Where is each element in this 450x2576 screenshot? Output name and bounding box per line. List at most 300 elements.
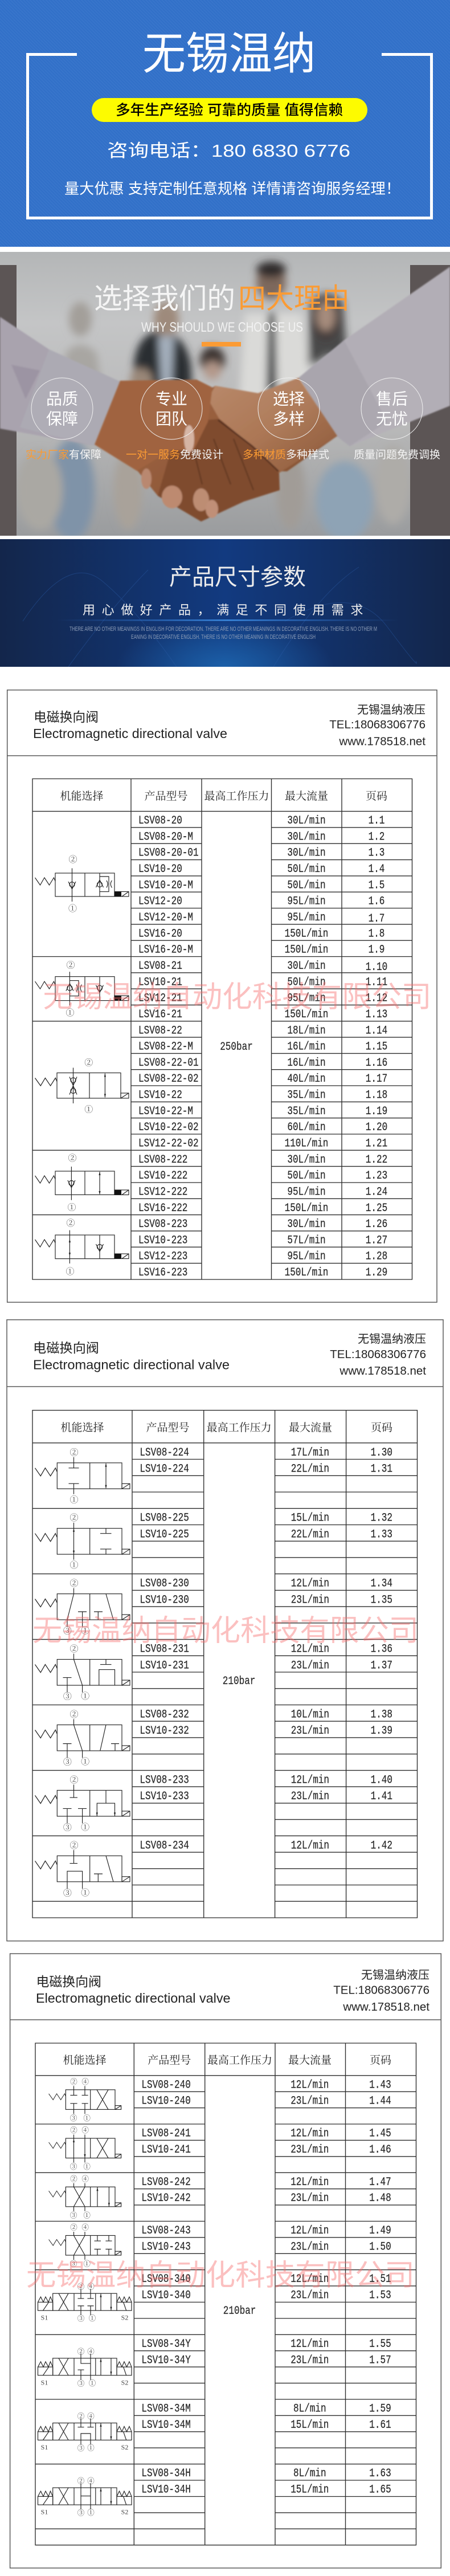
subheading: 用心做好产品，满足不同使用需求 — [83, 603, 370, 617]
sheet 3 page numbers: 1.49 — [369, 2225, 391, 2237]
valve symbol: LSV-340: ② — [77, 2281, 84, 2292]
sheet 3 model numbers: LSV10-340 — [141, 2289, 191, 2302]
sheet 1 flow values: 18L/min — [287, 1025, 326, 1037]
sheet 2 header right contact: 无锡温纳液压 — [358, 1332, 426, 1346]
sheet 3 page numbers: 1.48 — [369, 2192, 391, 2205]
sheet 1 page numbers: 1.19 — [366, 1105, 387, 1118]
decorative english text — [69, 627, 377, 639]
sheet 1 flow values: 30L/min — [287, 831, 326, 843]
sheet 3 model numbers: LSV10-240 — [141, 2095, 191, 2108]
sheet 3 model numbers: LSV10-34Y — [141, 2354, 191, 2367]
valve symbol: LSV-230 — [35, 1577, 130, 1637]
sheet 1 page numbers: 1.7 — [369, 913, 384, 926]
sheet 2 table grid — [32, 1411, 417, 1918]
sheet 1 model numbers: LSV10-20 — [138, 863, 182, 876]
sheet 3 flow values: 23L/min — [291, 2095, 329, 2108]
valve symbol: LSV-34Y: ① — [89, 2378, 96, 2388]
sheet 3 page numbers: 1.50 — [369, 2241, 391, 2253]
sheet 3 flow values: 23L/min — [291, 2289, 329, 2302]
sheet 1 page numbers — [366, 815, 387, 1279]
sheet 3 header right contact: 无锡温纳液压 — [361, 1968, 429, 1982]
badge: team: 专业 — [156, 390, 187, 408]
sheet 1 column headings: 页码 — [366, 788, 387, 803]
badge: after sales — [361, 378, 423, 439]
sheet 1 model numbers: LSV08-22 — [138, 1025, 182, 1037]
sheet 1 flow values: 30L/min — [287, 1218, 326, 1231]
sheet 3 model numbers: LSV08-34H — [141, 2468, 191, 2480]
valve symbol: LSV-243: ① — [83, 2258, 91, 2268]
subheading: english: WHY SHOULD WE CHOOSE US — [141, 320, 303, 335]
yellow slogan pill — [92, 98, 367, 122]
valve symbol: LSV-224: ② — [69, 1446, 79, 1458]
sheet 3 page numbers: 1.61 — [369, 2419, 391, 2432]
orange accent bar — [202, 342, 241, 347]
sheet 1 column headings: 产品型号 — [144, 788, 188, 803]
valve symbol: LSV-34M: ① — [87, 2443, 95, 2453]
valve symbol: LSV-21: ② — [66, 959, 75, 971]
sheet 2 page numbers: 1.34 — [371, 1578, 392, 1590]
sheet 2 header left — [33, 1340, 230, 1372]
photo: blurred office background with people — [0, 252, 450, 541]
sheet 1 column headings: 机能选择 — [60, 788, 104, 803]
sheet 1 page numbers: 1.2 — [369, 831, 384, 843]
valve symbol: LSV-225 — [35, 1511, 130, 1571]
sheet 1 model numbers: LSV16-222 — [138, 1202, 187, 1214]
badge: quality — [31, 378, 93, 439]
sheet 3 table grid — [35, 2043, 416, 2545]
sheet 1 pressure value: 250bar — [220, 1041, 253, 1054]
sheet 1 model numbers: LSV08-20 — [138, 815, 182, 828]
sheet 2 column headings: 产品型号 — [146, 1419, 190, 1434]
sheet 1 flow values: 16L/min — [287, 1057, 326, 1070]
sheet 1 header left: Electromagnetic directional valve — [33, 726, 227, 741]
sheet 3 page numbers: 1.44 — [369, 2095, 391, 2108]
sheet 1 flow values: 150L/min — [285, 944, 328, 956]
sheet 1 page numbers: 1.29 — [366, 1267, 387, 1279]
sheet 1 flow values: 35L/min — [287, 1089, 326, 1102]
valve symbol: LSV-242: ③ — [70, 2210, 77, 2220]
sheet 1 flow values: 50L/min — [287, 976, 326, 989]
sheet 1 flow values: 35L/min — [287, 1105, 326, 1118]
sheet 2 page numbers: 1.35 — [371, 1594, 392, 1607]
sheet 3 column headings: 产品型号 — [148, 2052, 191, 2067]
caption: after sales: 质量问题免费调换 — [354, 449, 440, 461]
sheet 3 header left: 电磁换向阀 — [36, 1974, 101, 1989]
panel: valve table sheet 3 — [10, 1954, 441, 2568]
valve symbol: LSV-232: ② — [69, 1708, 79, 1720]
valve symbol: LSV-223: ② — [66, 1217, 75, 1229]
sheet 3 flow values: 12L/min — [291, 2338, 329, 2351]
sheet 2 flow values: 22L/min — [291, 1529, 329, 1541]
sheet 3 page numbers: 1.46 — [369, 2143, 391, 2157]
valve symbol: LSV-230: ② — [69, 1577, 79, 1589]
valve symbol: LSV-222: ② — [68, 1152, 77, 1164]
sheet 3 page numbers — [369, 2079, 391, 2496]
sheet 1 model numbers: LSV08-20-01 — [138, 847, 199, 859]
valve symbol: LSV-34Y: ② — [77, 2346, 84, 2356]
sheet 1 page numbers: 1.4 — [369, 863, 384, 876]
valve symbol: LSV-20 — [35, 853, 129, 914]
sheet 3 model numbers — [141, 2079, 191, 2496]
valve symbol: LSV-232: ① — [81, 1755, 89, 1767]
watermark 3: 无锡温纳自动化科技有限公司 — [26, 2259, 415, 2292]
panel: navy parameters banner — [0, 539, 450, 667]
sheet 2 flow values — [291, 1446, 329, 1852]
photo: dark side bars — [0, 265, 450, 536]
sheet 3 flow values: 12L/min — [291, 2273, 329, 2286]
sheet 2 column headings: 最高工作压力 — [207, 1419, 272, 1434]
valve symbol: LSV-243: ② — [70, 2222, 77, 2232]
sheet 1 flow values: 30L/min — [287, 815, 326, 828]
sheet 2 flow values: 23L/min — [291, 1594, 329, 1607]
sheet 1 model numbers: LSV10-222 — [138, 1170, 187, 1183]
sheet 2 flow values: 10L/min — [291, 1709, 329, 1721]
sheet 2 page numbers: 1.42 — [371, 1840, 392, 1852]
sheet 1 flow values: 95L/min — [287, 1250, 326, 1263]
valve symbol: LSV-241: ② — [70, 2125, 77, 2135]
valve symbol: LSV-34H: ③ — [77, 2508, 84, 2518]
sheet 2 model numbers: LSV10-233 — [140, 1791, 189, 1803]
sheet 1 page numbers: 1.12 — [366, 992, 387, 1005]
sheet 1 flow values: 16L/min — [287, 1041, 326, 1053]
valve symbol: LSV-222 — [35, 1152, 129, 1213]
valve symbol: LSV-242: ① — [83, 2210, 91, 2220]
sheet 2 flow values: 23L/min — [291, 1725, 329, 1738]
sheet 3 flow values: 23L/min — [291, 2354, 329, 2367]
sheet 2 page numbers: 1.36 — [371, 1643, 392, 1656]
sheet 1 page numbers: 1.26 — [366, 1218, 387, 1231]
badge: team — [141, 378, 202, 439]
panel: hero banner — [0, 0, 450, 247]
valve symbol: LSV-240: ① — [83, 2113, 91, 2123]
sheet 3 flow values: 15L/min — [291, 2484, 329, 2496]
sheet 1 flow values — [285, 815, 328, 1279]
badge: after sales: 无忧 — [376, 410, 408, 427]
sheet 2 flow values: 12L/min — [291, 1840, 329, 1852]
sheet 2 header right contact — [330, 1332, 426, 1377]
sheet 3 page numbers: 1.53 — [369, 2289, 391, 2302]
sheet 1 flow values: 95L/min — [287, 895, 326, 908]
sheet 1 flow values: 95L/min — [287, 992, 326, 1005]
photo: handshake — [95, 378, 337, 521]
sheet 2 model numbers: LSV10-230 — [140, 1594, 189, 1607]
sheet 1 model numbers: LSV08-22-01 — [138, 1057, 199, 1070]
valve symbol: LSV-34Y: S1 — [41, 2378, 48, 2386]
sheet 1 flow values: 95L/min — [287, 1186, 326, 1199]
badge: choice — [258, 378, 320, 439]
panel: four reasons photo — [0, 252, 450, 541]
sheet 3 page numbers: 1.45 — [369, 2127, 391, 2140]
sheet 1 model numbers: LSV12-222 — [138, 1186, 187, 1199]
valve symbol: LSV-34H: ① — [87, 2507, 95, 2517]
badge: choice: 多样 — [273, 410, 305, 427]
valve symbol: LSV-241: ① — [83, 2161, 91, 2171]
sheet 2 page numbers — [371, 1446, 392, 1852]
sheet 3 model numbers: LSV10-241 — [141, 2143, 191, 2157]
sheet 1 page numbers: 1.10 — [366, 961, 387, 974]
sheet 3 flow values: 12L/min — [291, 2225, 329, 2237]
badge: after sales: 售后 — [376, 390, 408, 408]
sheet 3 column headings: 最高工作压力 — [207, 2052, 272, 2067]
valve symbol: LSV-340: S2 — [121, 2314, 128, 2322]
sheet 2 header left: Electromagnetic directional valve — [33, 1358, 230, 1372]
sheet 3 flow values: 23L/min — [291, 2192, 329, 2205]
badge: choice: 选择 — [273, 390, 305, 408]
valve symbol: LSV-34Y — [38, 2346, 132, 2388]
sheet 1 header right contact — [329, 703, 426, 748]
sheet 2 model numbers: LSV10-224 — [140, 1463, 189, 1476]
sheet 1 page numbers: 1.23 — [366, 1170, 387, 1183]
sheet 2 column headings: 页码 — [371, 1419, 392, 1434]
badge: quality: 品质 — [46, 390, 78, 408]
sheet 3 page numbers: 1.51 — [369, 2273, 391, 2286]
sheet 1 model numbers: LSV16-20 — [138, 928, 182, 940]
offer text: 量大优惠 支持定制任意规格 详情请咨询服务经理！ — [64, 180, 400, 197]
valve symbol: LSV-240: ③ — [70, 2113, 77, 2123]
sheet 2 flow values: 23L/min — [291, 1660, 329, 1672]
sheet 1 header right contact: TEL:18068306776 — [329, 718, 426, 731]
sheet 3 header right contact: TEL:18068306776 — [333, 1984, 429, 1997]
valve symbol: LSV-225: ① — [69, 1559, 79, 1571]
sheet 1 flow values: 57L/min — [287, 1234, 326, 1247]
sheet 2 page numbers: 1.40 — [371, 1774, 392, 1787]
sheet 3 header left — [36, 1974, 230, 2006]
sheet 1 header right contact: 无锡温纳液压 — [357, 703, 426, 716]
valve symbol: LSV-241: ④ — [81, 2125, 89, 2135]
sheet 1 model numbers: LSV08-20-M — [138, 831, 193, 843]
sheet 1 flow values: 95L/min — [287, 912, 326, 924]
sheet 2 model numbers: LSV10-231 — [140, 1660, 189, 1672]
sheet 1 model numbers: LSV10-22-M — [138, 1105, 193, 1118]
valve symbol: LSV-233: ① — [81, 1821, 89, 1833]
sheet 1 model numbers: LSV08-21 — [138, 960, 182, 973]
valve symbol: LSV-224: ① — [69, 1493, 79, 1505]
watermark 2: 无锡温纳自动化科技有限公司 — [32, 1615, 419, 1648]
sheet 2 flow values: 23L/min — [291, 1791, 329, 1803]
sheet 1 page numbers: 1.16 — [366, 1057, 387, 1070]
valve symbol: LSV-234: ① — [81, 1886, 89, 1898]
sheet 1 page numbers: 1.25 — [366, 1202, 387, 1214]
sheet 2 model numbers: LSV10-225 — [140, 1529, 189, 1541]
sheet 1 model numbers: LSV16-21 — [138, 1009, 182, 1021]
sheet 1 page numbers: 1.11 — [366, 976, 387, 989]
sheet 1 model numbers — [138, 815, 199, 1279]
sheet 2 page numbers: 1.38 — [371, 1709, 392, 1721]
sheet 1 model numbers: LSV16-20-M — [138, 944, 193, 956]
sheet 1 column headings: 最大流量 — [285, 788, 328, 803]
caption: team: 一对一服务免费设计 — [126, 449, 223, 461]
sheet 3 flow values: 12L/min — [291, 2079, 329, 2092]
valve symbol: LSV-233: ③ — [63, 1821, 72, 1833]
valve symbol: LSV-223: ① — [66, 1265, 75, 1277]
sheet 1 model numbers: LSV12-223 — [138, 1250, 187, 1263]
valve symbol: LSV-34M: ④ — [87, 2411, 95, 2421]
valve symbol: LSV-224 — [35, 1446, 130, 1505]
sheet 3 model numbers: LSV08-240 — [141, 2079, 191, 2092]
valve symbol: LSV-231: ① — [81, 1690, 89, 1702]
sheet 2 column headings: 机能选择 — [60, 1419, 104, 1434]
sheet 3 flow values: 12L/min — [291, 2176, 329, 2188]
valve symbol: LSV-22: ① — [84, 1103, 93, 1115]
valve symbol: LSV-34M: ② — [77, 2411, 84, 2421]
sheet 1 page numbers: 1.28 — [366, 1250, 387, 1263]
sheet 2 page numbers: 1.31 — [371, 1463, 392, 1476]
sheet 1 page numbers: 1.22 — [366, 1154, 387, 1166]
valve symbol: LSV-230: ① — [81, 1624, 89, 1636]
valve symbol: LSV-34H: S2 — [121, 2508, 128, 2516]
sheet 1 flow values: 150L/min — [285, 928, 328, 940]
sheet 3 model numbers: LSV08-243 — [141, 2225, 191, 2237]
sheet 3 flow values: 23L/min — [291, 2241, 329, 2253]
sheet 2 model numbers: LSV08-233 — [140, 1774, 189, 1787]
valve symbol: LSV-231: ③ — [63, 1690, 72, 1702]
sheet 1 header left: 电磁换向阀 — [34, 710, 99, 724]
sheet 1 flow values: 150L/min — [285, 1267, 328, 1279]
valve symbol: LSV-242: ② — [70, 2173, 77, 2183]
sheet 1 model numbers: LSV10-22 — [138, 1089, 182, 1102]
sheet 3 column headings — [63, 2052, 391, 2067]
sheet 2 column headings — [60, 1419, 392, 1434]
sheet 2 flow values: 15L/min — [291, 1512, 329, 1525]
sheet 3 page numbers: 1.43 — [369, 2079, 391, 2092]
valve symbol: LSV-234 — [35, 1839, 130, 1898]
sheet 3 flow values — [291, 2079, 329, 2496]
valve symbol: LSV-34M: S1 — [41, 2443, 48, 2451]
valve symbol: LSV-20: ② — [68, 853, 77, 865]
valve symbol: LSV-243: ④ — [81, 2222, 89, 2232]
sheet 1 flow values: 50L/min — [287, 863, 326, 876]
sheet 3 model numbers: LSV08-34Y — [141, 2338, 191, 2351]
sheet 1 page numbers: 1.3 — [369, 847, 384, 859]
valve symbol: LSV-34Y: ④ — [87, 2346, 95, 2356]
caption: quality: 实力厂家有保障 — [26, 449, 101, 461]
sheet 1 flow values: 150L/min — [285, 1009, 328, 1021]
sheet 2 model numbers: LSV08-232 — [140, 1709, 189, 1721]
badge: quality: 保障 — [46, 410, 78, 427]
sheet 2 model numbers: LSV08-225 — [140, 1512, 189, 1525]
sheet 3 page numbers: 1.59 — [369, 2403, 391, 2415]
valve symbol: LSV-240: ② — [70, 2076, 77, 2086]
heading: four reasons: 选择我们的 — [94, 283, 235, 315]
sheet 2 page numbers: 1.37 — [371, 1660, 392, 1672]
valve symbol: LSV-233: ② — [69, 1774, 79, 1786]
valve symbol: LSV-233 — [35, 1774, 130, 1833]
sheet 3 pressure value: 210bar — [223, 2305, 256, 2318]
valve symbol: LSV-234: ③ — [63, 1886, 72, 1898]
sheet 3 column headings: 最大流量 — [288, 2052, 332, 2067]
sheet 1 page numbers: 1.8 — [369, 928, 384, 940]
valve symbol: LSV-340: ① — [89, 2313, 96, 2323]
sheet 1 header right contact: www.178518.net — [338, 735, 426, 748]
sheet 1 page numbers: 1.1 — [369, 815, 384, 828]
sheet 3 model numbers: LSV10-243 — [141, 2241, 191, 2253]
sheet 1 page numbers: 1.20 — [366, 1122, 387, 1134]
valve symbol: LSV-22 — [35, 1057, 129, 1115]
valve symbol: LSV-231 — [35, 1642, 130, 1702]
yellow slogan pill: 多年生产经验 可靠的质量 值得信赖 — [116, 103, 343, 119]
sheet 1 model numbers: LSV08-22-02 — [138, 1073, 199, 1086]
valve symbol: LSV-34H: S1 — [41, 2508, 48, 2516]
photo: left and right sleeves — [0, 267, 450, 446]
sheet 3 model numbers: LSV08-241 — [141, 2127, 191, 2140]
sheet 2 header left: 电磁换向阀 — [33, 1340, 99, 1355]
sheet 1 model numbers: LSV12-20 — [138, 895, 182, 908]
sheet 1 model numbers: LSV12-22-02 — [138, 1138, 199, 1150]
sheet 3 header right contact — [333, 1968, 429, 2013]
badge: team: 团队 — [156, 410, 187, 427]
valve symbol: LSV-340: S1 — [41, 2314, 48, 2322]
sheet 2 model numbers: LSV08-231 — [140, 1643, 189, 1656]
sheet 1 page numbers: 1.17 — [366, 1073, 387, 1086]
valve symbol: LSV-34H: ② — [77, 2476, 84, 2486]
sheet 3 column headings: 页码 — [370, 2052, 391, 2067]
sheet 1 model numbers: LSV10-20-M — [138, 879, 193, 892]
valve symbol: LSV-340: ④ — [87, 2281, 95, 2292]
valve symbol: LSV-222: ① — [67, 1201, 76, 1213]
valve symbol: LSV-240: ④ — [81, 2076, 89, 2086]
sheet 2 page numbers: 1.33 — [371, 1529, 392, 1541]
sheet 2 page numbers: 1.32 — [371, 1512, 392, 1525]
sheet 3 model numbers: LSV10-242 — [141, 2192, 191, 2205]
caption: choice: 多种材质多种样式 — [243, 449, 329, 461]
sheet 3 flow values: 8L/min — [293, 2403, 326, 2415]
valve symbol: LSV-34Y: ③ — [77, 2378, 84, 2388]
sheet 3 flow values: 12L/min — [291, 2127, 329, 2140]
sheet 1 model numbers: LSV16-223 — [138, 1267, 187, 1279]
sheet 2 page numbers: 1.30 — [371, 1446, 392, 1459]
sheet 2 flow values: 12L/min — [291, 1643, 329, 1656]
panel: valve table sheet 1 — [7, 690, 437, 1302]
sheet 1 flow values: 150L/min — [285, 1202, 328, 1214]
sheet 2 page numbers: 1.39 — [371, 1725, 392, 1738]
sheet 2 header right contact: www.178518.net — [339, 1364, 426, 1377]
sheet 1 page numbers: 1.5 — [369, 879, 384, 892]
sheet 1 model numbers: LSV08-222 — [138, 1154, 187, 1166]
valve symbol: LSV-234: ② — [69, 1839, 79, 1851]
valve symbol: LSV-242 — [49, 2173, 121, 2220]
valve symbol: LSV-340 — [38, 2281, 132, 2324]
valve symbol: LSV-340: ③ — [77, 2313, 84, 2324]
valve symbol: LSV-240 — [49, 2076, 121, 2123]
sheet 1 flow values: 110L/min — [285, 1138, 328, 1150]
valve symbol: LSV-34M: S2 — [121, 2443, 128, 2451]
valve symbol: LSV-34H: ④ — [87, 2476, 95, 2486]
sheet 3 model numbers: LSV10-34M — [141, 2419, 191, 2432]
sheet 2 pressure value: 210bar — [223, 1676, 255, 1688]
valve symbol: LSV-34Y: S2 — [121, 2378, 128, 2386]
valve symbol: LSV-34M — [38, 2411, 132, 2453]
heading: product parameters: 产品尺寸参数 — [169, 565, 306, 590]
sheet 3 flow values: 8L/min — [293, 2468, 326, 2480]
sheet 1 model numbers: LSV08-22-M — [138, 1041, 193, 1053]
sheet 3 page numbers: 1.57 — [369, 2354, 391, 2367]
sheet 3 model numbers: LSV08-242 — [141, 2176, 191, 2188]
panel: valve table sheet 2 — [7, 1320, 443, 1941]
sheet 1 model numbers: LSV10-223 — [138, 1234, 187, 1247]
sheet 3 model numbers: LSV08-340 — [141, 2273, 191, 2286]
sheet 1 page numbers: 1.13 — [366, 1009, 387, 1021]
valve symbol: LSV-223 — [35, 1217, 129, 1277]
decorative english text: EANING IN DECORATIVE ENGLISH. THERE IS NO OTHER MEANING IN DECORATIVE ENGLISH — [131, 634, 316, 641]
sheet 1 page numbers: 1.24 — [366, 1186, 387, 1199]
valve symbol: LSV-243 — [49, 2222, 121, 2268]
sheet 3 header right contact: www.178518.net — [342, 2000, 429, 2013]
sheet 3 page numbers: 1.55 — [369, 2338, 391, 2351]
sheet 1 flow values: 30L/min — [287, 847, 326, 859]
valve symbol: LSV-21: ① — [66, 1006, 75, 1018]
phone number: 咨询电话：180 6830 6776 — [107, 141, 350, 161]
sheet 1 flow values: 50L/min — [287, 1170, 326, 1183]
